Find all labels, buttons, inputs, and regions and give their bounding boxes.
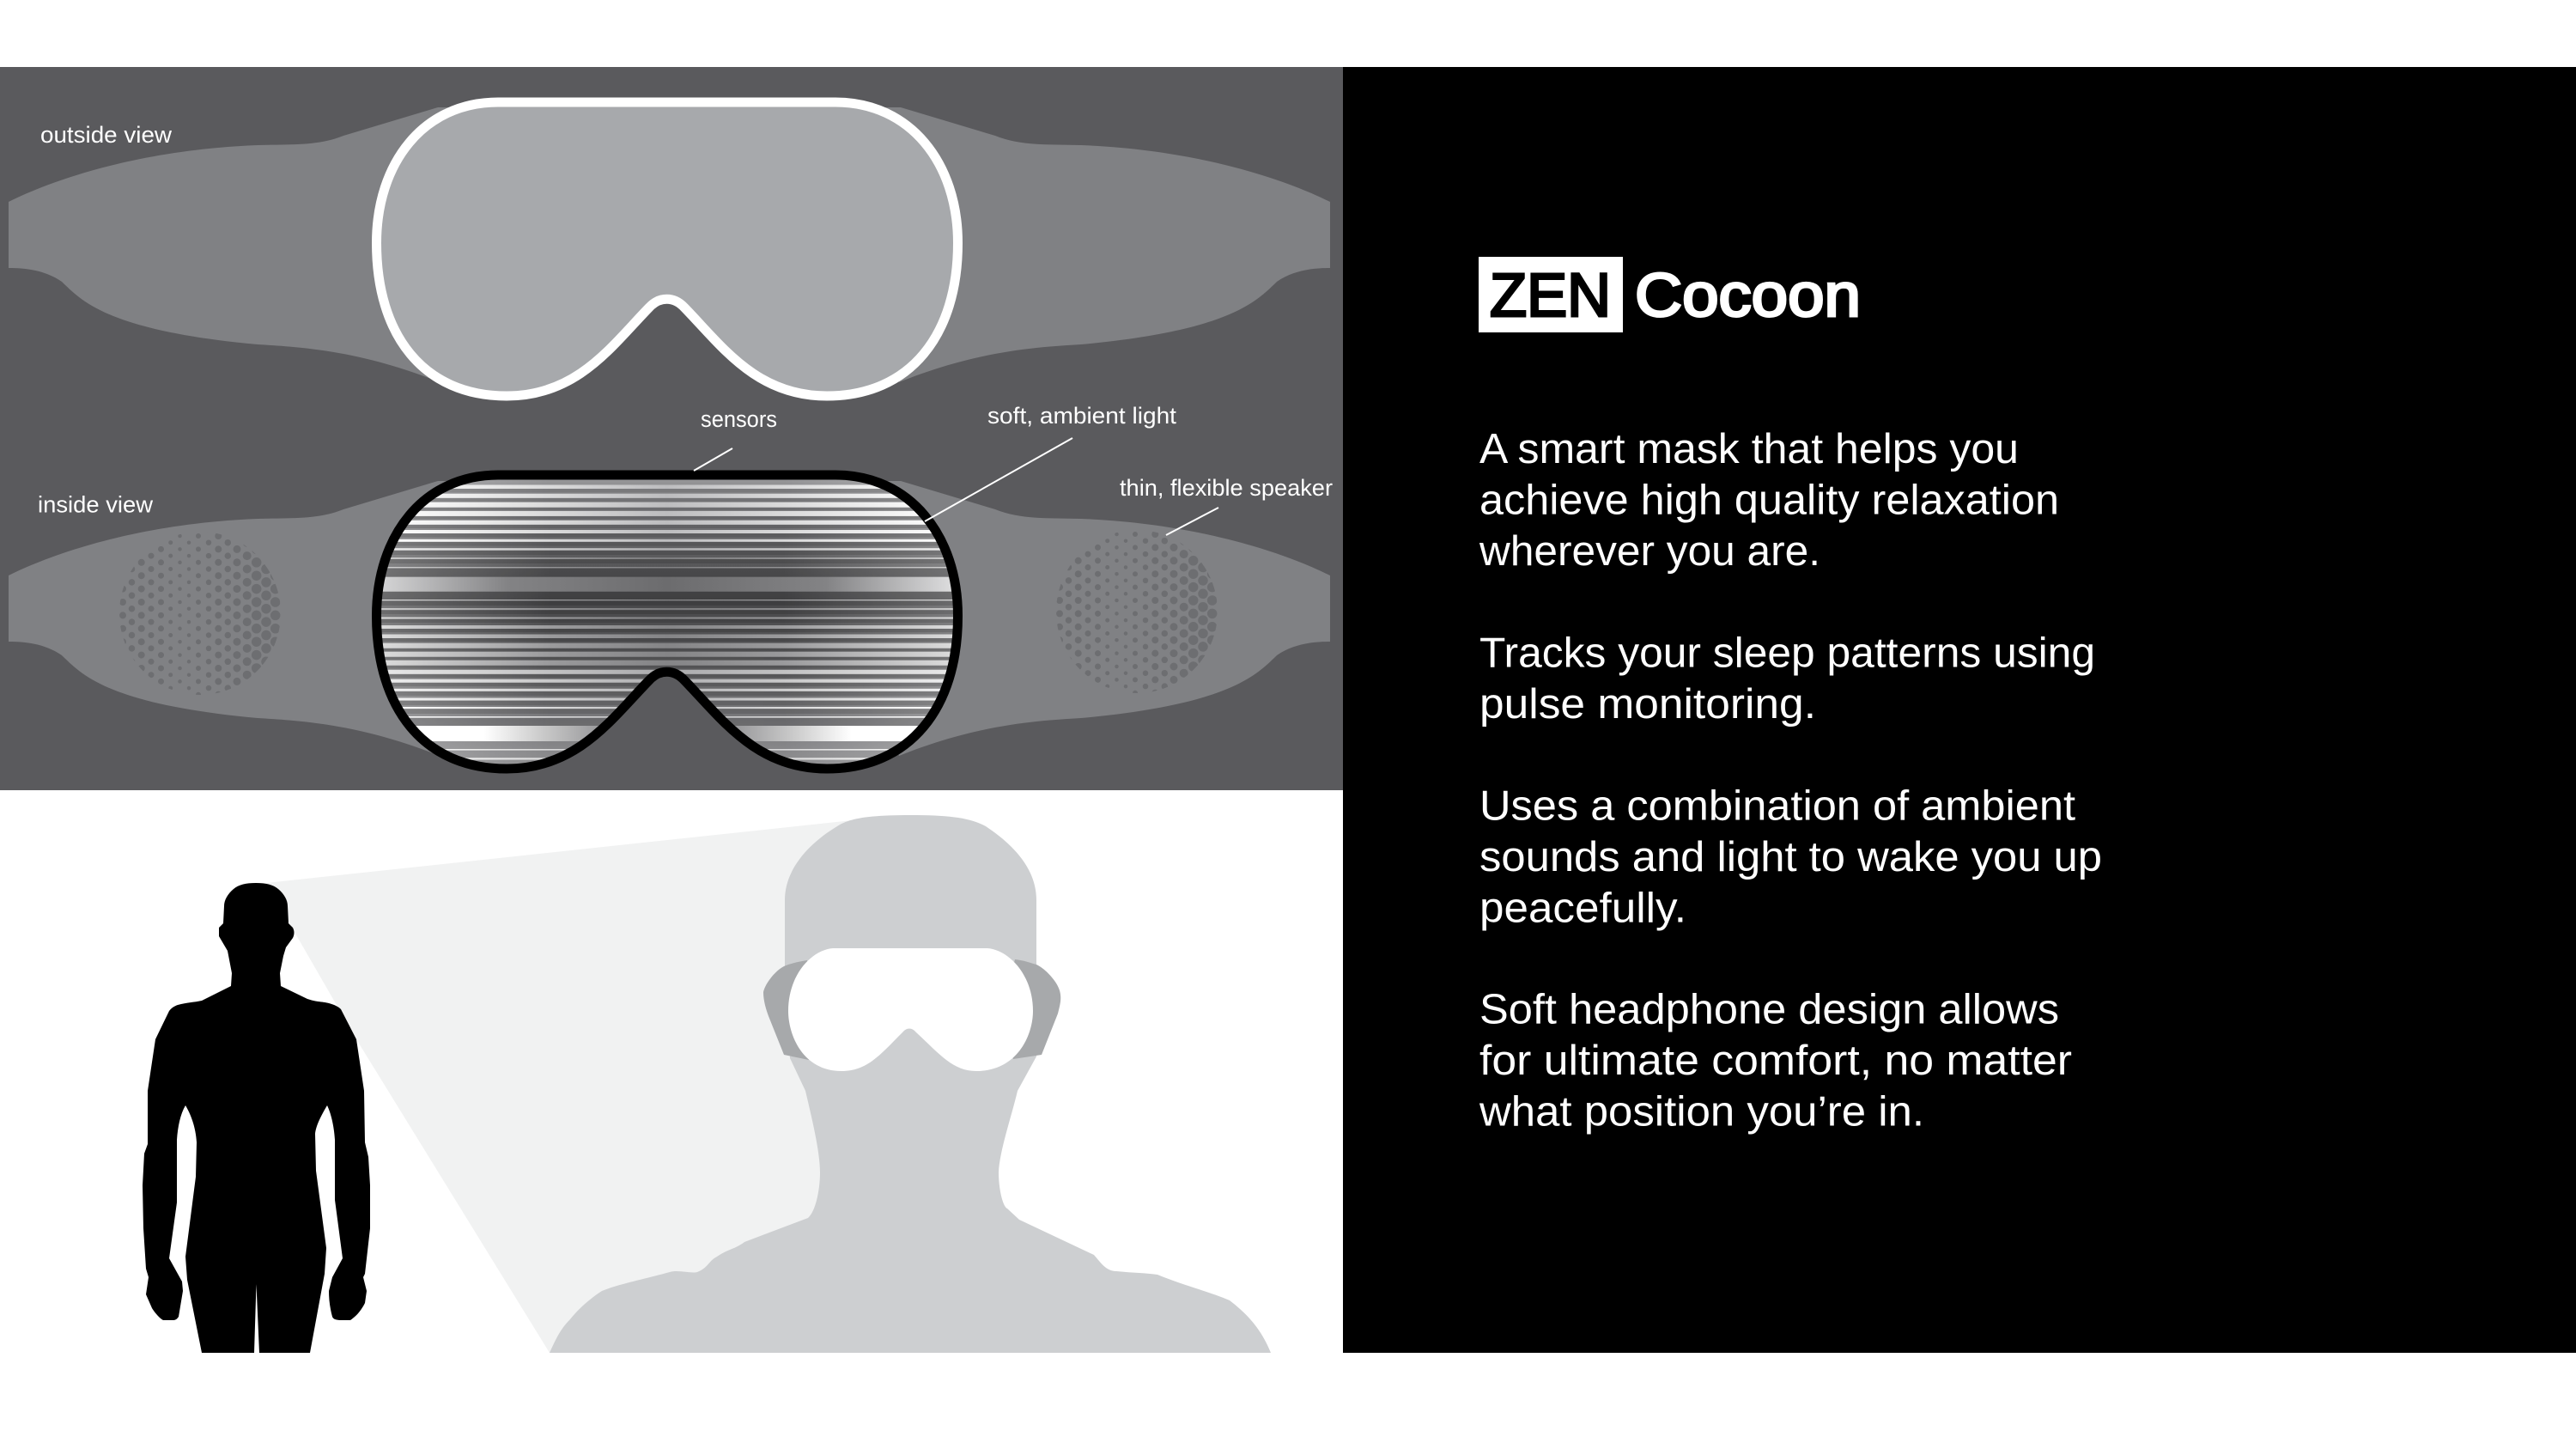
text: ambient wake paragraph: sounds and light to wake you up [1479,834,2102,880]
text: sleep tracking paragraph [1479,630,2095,728]
logo: ZEN Cocoon: ZEN [1490,262,1611,330]
panel: scale illustration [143,815,1271,1353]
panel: mask views [0,67,1343,790]
enlarged head silhouette [550,815,1271,1353]
text: intro paragraph: achieve high quality relaxation [1479,478,2059,524]
text: ambient wake paragraph [1479,783,2102,931]
leader line: sensors [694,448,732,471]
icon: left speaker dots [123,516,276,709]
outside view mask [9,102,1330,396]
text: sleep tracking paragraph: pulse monitoring. [1479,681,1816,728]
text: intro paragraph: wherever you are. [1479,528,1820,575]
mask outline [376,475,958,769]
mask strap with speakers [9,481,1330,756]
text: intro paragraph: A smart mask that helps you [1479,426,2019,472]
label: soft, ambient light: soft, ambient light [987,403,1177,429]
text: comfort paragraph: what position you’re in. [1479,1089,1924,1135]
label: outside view: outside view [40,122,173,148]
leader line: speaker [1166,508,1218,535]
label: sensors: sensors [701,406,777,432]
logo: ZEN Cocoon: Cocoon [1635,262,1861,330]
text: ambient wake paragraph: Uses a combination of ambient [1479,783,2075,830]
panel: product description [1343,67,2576,1353]
logo: ZEN Cocoon [1479,257,1861,332]
leader line: soft ambient light [925,438,1072,521]
text: comfort paragraph [1479,986,2072,1135]
label: inside view: inside view [38,491,154,517]
text: comfort paragraph: Soft headphone design allows [1479,986,2059,1032]
white mask on head [788,948,1033,1071]
striped ambient light lens [381,479,953,764]
icon: right speaker dots [1060,514,1212,707]
text: intro paragraph [1479,426,2059,575]
text: sleep tracking paragraph: Tracks your sleep patterns using [1479,630,2095,677]
person silhouette [143,883,370,1353]
text: comfort paragraph: for ultimate comfort, no matter [1479,1038,2072,1084]
head strap [763,959,1060,1060]
label: thin, flexible speaker: thin, flexible speaker [1120,475,1333,501]
inside view mask [9,468,1330,777]
text: ambient wake paragraph: peacefully. [1479,885,1686,931]
zoom wedge [266,817,910,1353]
